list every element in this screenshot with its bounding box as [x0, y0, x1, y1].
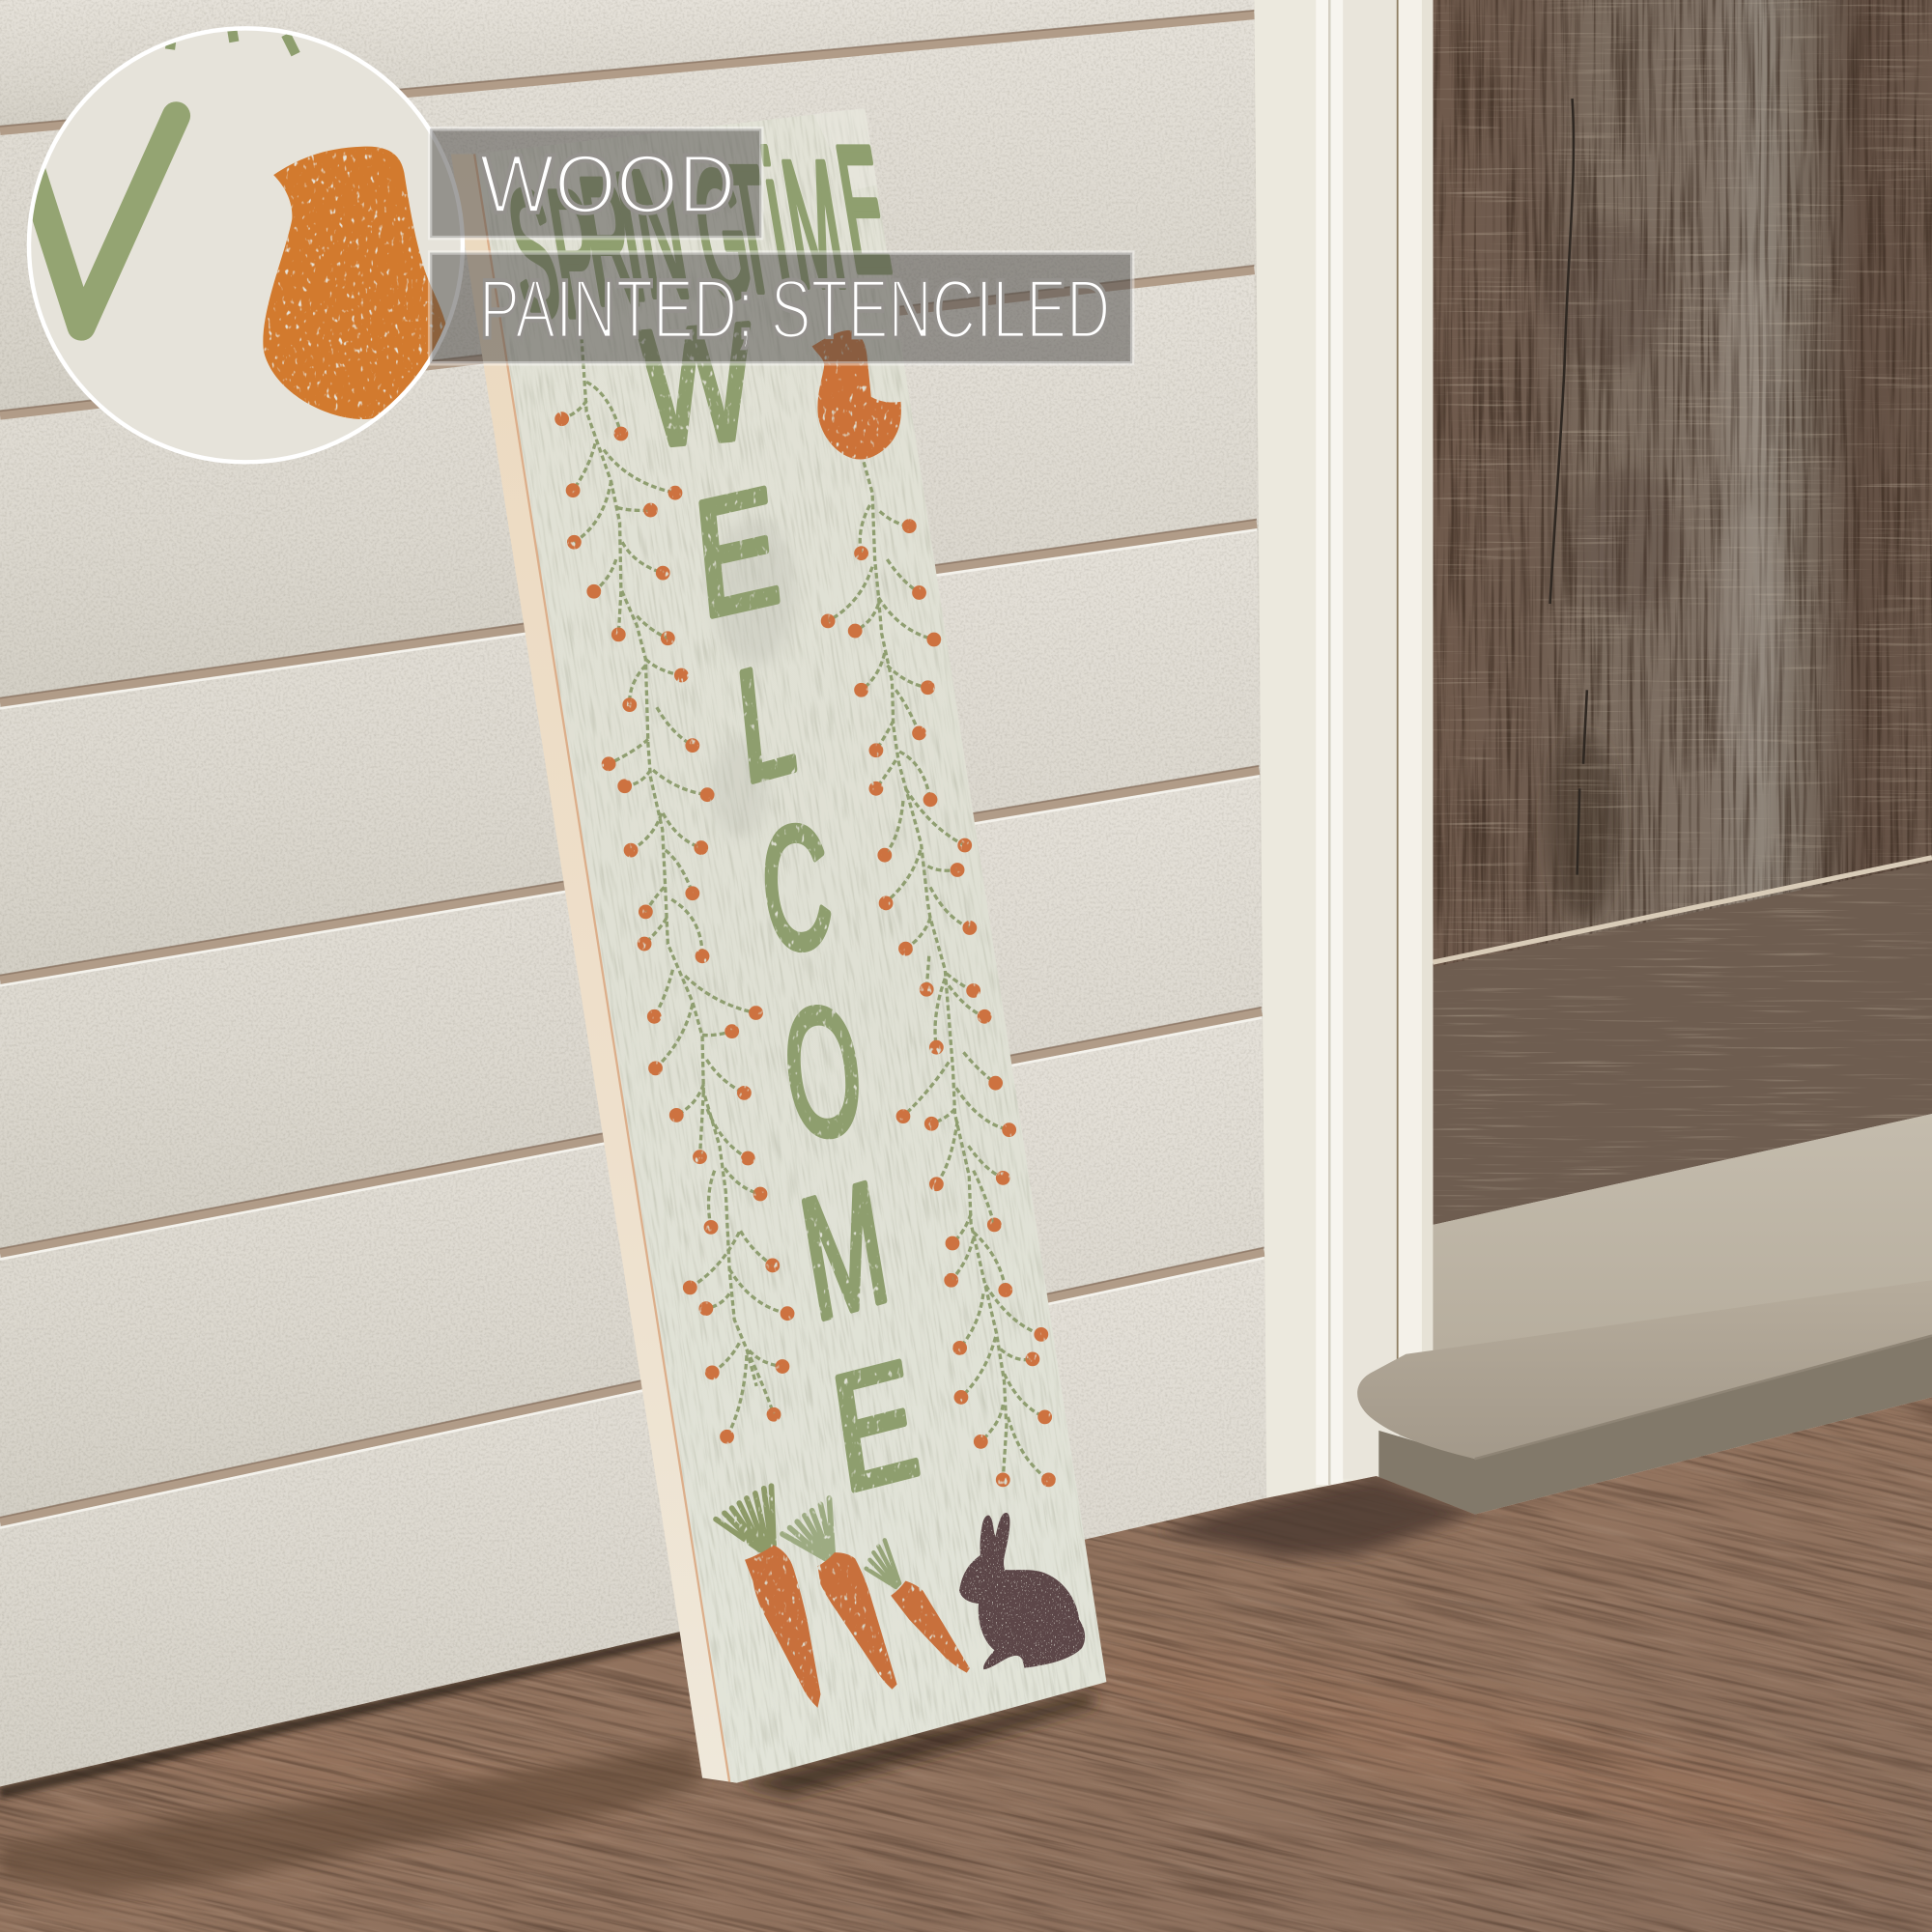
heading: WELCOME	[636, 289, 928, 1527]
icon: orange bird on sign	[812, 330, 901, 459]
panel: dark wood door panel	[1433, 0, 1932, 1233]
heading: WELCOME: L	[730, 626, 802, 816]
label: PAINTED; STENCILED	[430, 252, 1132, 363]
chart: left berry vine	[554, 337, 794, 1444]
icon: rabbit silhouette	[959, 1513, 1085, 1669]
icon: three carrots	[716, 1486, 970, 1708]
sign board	[451, 108, 1106, 1783]
heading: WELCOME: M	[790, 1147, 898, 1356]
heading: WELCOME: O	[776, 970, 870, 1174]
heading: WELCOME: E	[823, 1324, 928, 1527]
panel: shiplap wall	[0, 0, 1269, 1799]
label: PAINTED; STENCILED: PAINTED; STENCILED	[479, 262, 1110, 355]
panel: white door trim	[1254, 0, 1433, 1502]
chart: right berry vine	[821, 462, 1056, 1487]
panel: door sill	[1357, 1114, 1932, 1515]
panel: welcome sign	[451, 108, 1106, 1783]
heading: WELCOME: E	[688, 452, 786, 653]
icon: enlarged stencil stroke	[32, 116, 176, 327]
heading: WELCOME: C	[753, 787, 839, 989]
heading: SPRINGTIME: SPRINGTiME	[490, 109, 907, 354]
callout: magnified detail circle	[29, 27, 463, 462]
heading: WELCOME: W	[636, 289, 760, 481]
icon: enlarged orange bird	[263, 147, 450, 419]
label: WOOD: WOOD	[479, 137, 735, 231]
panel: wood floor	[0, 1397, 1932, 1932]
label: WOOD	[430, 128, 761, 238]
